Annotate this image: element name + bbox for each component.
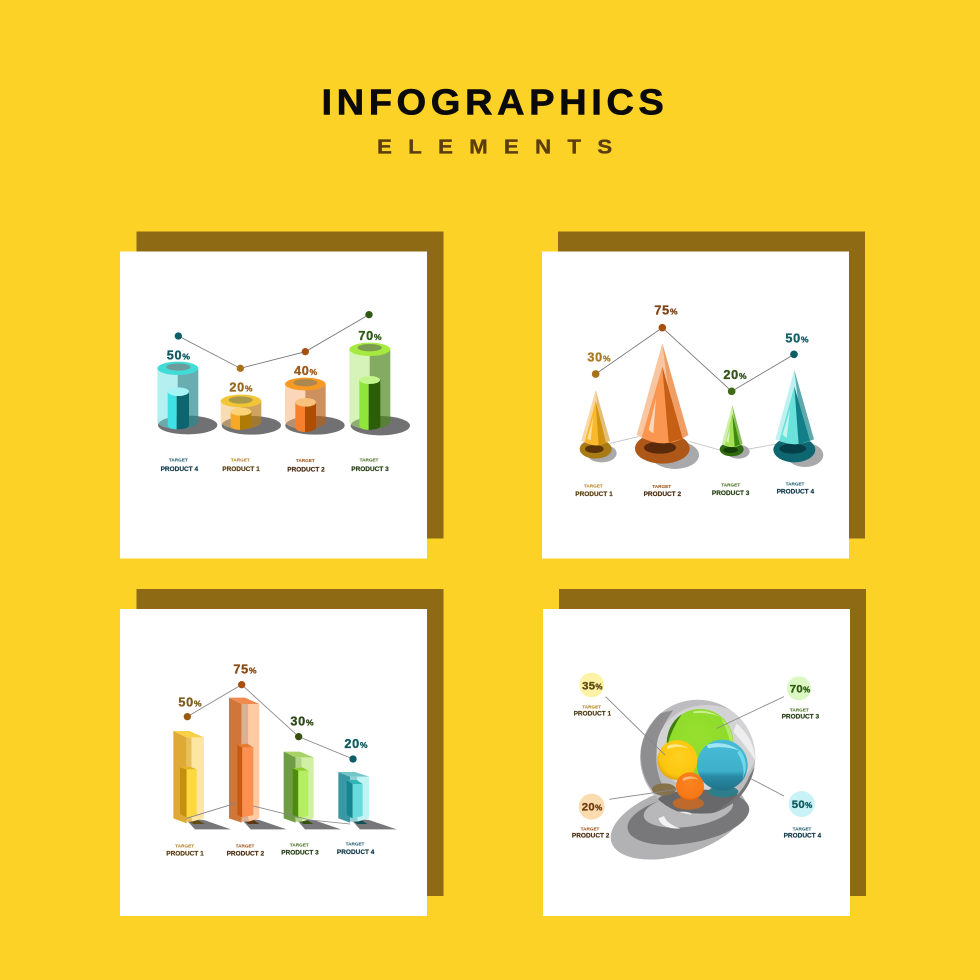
value labels: 75% bbox=[654, 304, 678, 318]
value labels: 40% bbox=[294, 364, 318, 378]
cylinder: product 4 bbox=[157, 362, 217, 434]
product labels: PRODUCT 1 bbox=[222, 466, 260, 473]
value labels bbox=[587, 304, 809, 382]
value labels: 20% bbox=[723, 368, 747, 382]
bar: product 4 bbox=[338, 772, 369, 823]
line chart overlay bbox=[175, 311, 373, 372]
value labels: 30% bbox=[587, 350, 611, 364]
line chart overlay bbox=[184, 681, 357, 763]
bar: product 2 bbox=[229, 698, 259, 823]
product labels: TARGET bbox=[346, 842, 365, 847]
cylinder: product 3 bbox=[349, 343, 410, 435]
cylinder: product 2 bbox=[285, 378, 345, 435]
line chart overlay bbox=[592, 324, 798, 395]
callout: product 4: 50% bbox=[792, 799, 812, 811]
sphere shadow bbox=[602, 769, 755, 874]
callout: product 2: TARGET bbox=[581, 827, 600, 832]
product labels: TARGET bbox=[584, 484, 603, 489]
cone: product 3 bbox=[720, 405, 750, 459]
product labels: TARGET bbox=[236, 844, 255, 849]
callout: product 1 bbox=[574, 673, 611, 717]
panel: sphere chart bbox=[543, 589, 866, 916]
value labels: 50% bbox=[167, 348, 190, 362]
product labels: PRODUCT 3 bbox=[281, 850, 319, 857]
floor shadows bbox=[185, 818, 397, 829]
callout: product 3 bbox=[782, 676, 819, 720]
value labels: 20% bbox=[344, 737, 368, 751]
product labels bbox=[166, 842, 375, 858]
callout: product 4 bbox=[784, 791, 821, 839]
cone: product 4 bbox=[773, 370, 823, 467]
reflection under balls bbox=[652, 783, 738, 810]
callout: product 3: 70% bbox=[790, 684, 810, 696]
product labels: TARGET bbox=[169, 458, 188, 463]
product labels: TARGET bbox=[231, 458, 250, 463]
callout: product 1: PRODUCT 1 bbox=[574, 710, 611, 717]
product labels: PRODUCT 2 bbox=[644, 491, 681, 498]
panel: bar chart bbox=[120, 589, 444, 916]
product labels: PRODUCT 3 bbox=[351, 466, 389, 473]
cylinder: product 1 bbox=[221, 395, 281, 435]
callout: product 2: 20% bbox=[582, 802, 602, 814]
product labels: TARGET bbox=[721, 483, 740, 488]
product labels: TARGET bbox=[652, 484, 671, 489]
product labels: PRODUCT 1 bbox=[166, 851, 204, 858]
title: INFOGRAPHICS bbox=[322, 82, 664, 122]
value labels: 30% bbox=[290, 715, 314, 729]
product labels: PRODUCT 4 bbox=[337, 849, 375, 856]
product labels: PRODUCT 4 bbox=[777, 489, 814, 496]
callout: product 1: TARGET bbox=[582, 705, 601, 710]
connecting lines bbox=[610, 437, 777, 451]
callout: product 4: PRODUCT 4 bbox=[784, 832, 821, 839]
value labels: 50% bbox=[178, 696, 202, 710]
glass sphere bbox=[640, 700, 757, 817]
product labels: TARGET bbox=[360, 458, 379, 463]
callout: product 3: PRODUCT 3 bbox=[782, 713, 819, 720]
callout: product 3: TARGET bbox=[790, 708, 809, 713]
callout: product 2: PRODUCT 2 bbox=[572, 832, 610, 839]
bar: product 3 bbox=[284, 752, 314, 823]
product labels: TARGET bbox=[175, 844, 194, 849]
product labels: PRODUCT 3 bbox=[712, 490, 750, 497]
product labels: TARGET bbox=[290, 842, 309, 847]
panel: cone chart bbox=[542, 232, 865, 558]
value labels: 70% bbox=[358, 329, 382, 343]
product labels: TARGET bbox=[296, 458, 315, 463]
callout: product 1: 35% bbox=[582, 680, 603, 692]
value labels: 75% bbox=[233, 662, 257, 676]
value labels: 20% bbox=[229, 380, 253, 394]
product labels: TARGET bbox=[786, 481, 805, 486]
cone: product 1 bbox=[580, 390, 617, 462]
cone: product 2 bbox=[635, 343, 699, 469]
leader lines bbox=[606, 697, 784, 799]
product labels: PRODUCT 2 bbox=[287, 466, 325, 473]
panel: cylinder chart bbox=[120, 232, 444, 558]
ball: product 2 bbox=[676, 772, 704, 800]
product labels: PRODUCT 2 bbox=[227, 851, 264, 858]
value labels: 50% bbox=[785, 332, 809, 346]
product labels: PRODUCT 4 bbox=[161, 466, 198, 473]
bar: product 1 bbox=[173, 731, 204, 823]
subtitle: ELEMENTS bbox=[377, 137, 612, 158]
product labels bbox=[575, 481, 814, 498]
callout: product 2 bbox=[572, 794, 610, 839]
ball: product 4 bbox=[697, 740, 748, 790]
value labels bbox=[167, 329, 382, 394]
connecting lines bbox=[187, 803, 350, 824]
product labels bbox=[161, 458, 389, 473]
callout: product 4: TARGET bbox=[793, 827, 812, 832]
ball: product 3 bbox=[667, 709, 733, 776]
product labels: PRODUCT 1 bbox=[575, 491, 613, 498]
value labels bbox=[178, 662, 368, 751]
ball: product 1 bbox=[657, 740, 697, 780]
